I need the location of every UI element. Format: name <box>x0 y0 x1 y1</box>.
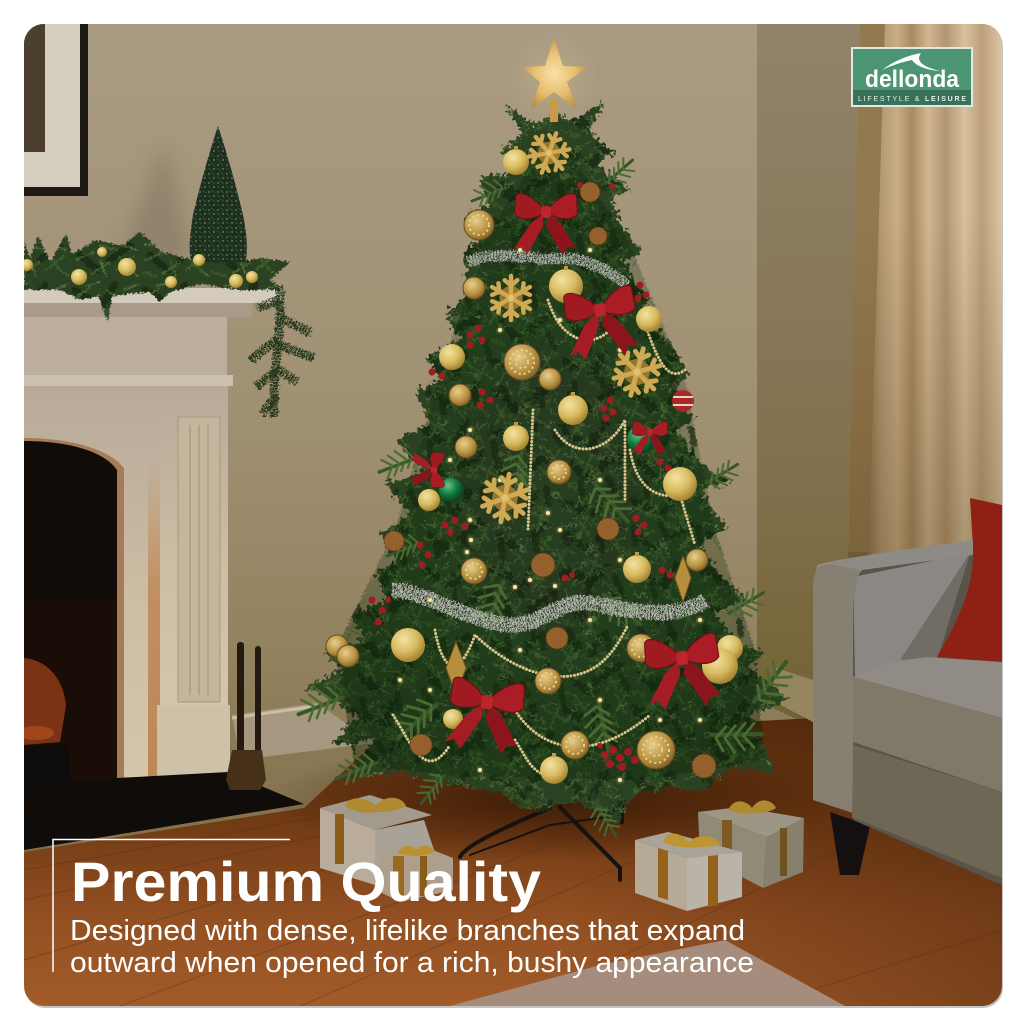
gift centre right <box>635 832 742 911</box>
rug <box>450 940 845 1006</box>
logo plate <box>851 47 973 107</box>
gift far right <box>698 800 804 888</box>
christmas tree <box>299 32 801 839</box>
silver tinsel top <box>468 256 628 286</box>
firebox glow <box>24 600 117 780</box>
star glow <box>508 32 600 124</box>
garland ornaments <box>21 247 258 288</box>
fairy lights <box>398 248 702 782</box>
logo swoosh <box>882 53 940 71</box>
foliage tone <box>335 130 765 780</box>
mat <box>24 24 80 187</box>
logo name: dellonda <box>865 66 960 93</box>
moulding <box>24 375 233 386</box>
foliage overlay <box>335 130 765 780</box>
heading: Premium Quality <box>71 850 541 913</box>
curtain drape <box>868 24 1002 560</box>
gold baubles <box>391 149 743 784</box>
hanging garland <box>251 286 314 417</box>
arm inner shadow <box>900 553 970 660</box>
band under shelf <box>24 303 252 317</box>
pearl garlands <box>393 300 695 775</box>
shelf <box>24 288 281 303</box>
side wall <box>757 24 880 760</box>
sofa seat front <box>853 677 1002 792</box>
column warm edge <box>148 478 160 776</box>
text frame <box>53 840 290 972</box>
cone <box>190 126 247 268</box>
plinth <box>157 705 230 778</box>
red striped bauble <box>672 390 694 412</box>
tree wall shadow <box>122 158 190 259</box>
gift back left <box>320 795 434 885</box>
stand brace <box>470 815 620 855</box>
pine cones <box>384 182 716 778</box>
wall picture <box>24 24 88 196</box>
sofa base <box>852 745 1002 878</box>
caption <box>70 850 754 979</box>
baseboard left <box>232 703 374 760</box>
curtain shade <box>848 24 1002 560</box>
tree stand <box>460 800 622 880</box>
sofa arm top <box>814 540 973 590</box>
firebox <box>24 441 117 820</box>
mantel garland <box>21 232 314 417</box>
hearth <box>24 772 304 850</box>
red berries <box>368 182 674 771</box>
gift front left <box>380 845 453 902</box>
glitter baubles <box>326 210 708 769</box>
sofa arm inner <box>853 553 970 676</box>
red pillow <box>937 498 1002 662</box>
garland body <box>24 232 290 322</box>
bauble caps <box>514 146 639 757</box>
glitter lace <box>466 215 669 763</box>
body line 1: Designed with dense, lifelike branches that expand <box>70 915 745 947</box>
fire tools <box>226 642 266 790</box>
grate <box>24 745 70 780</box>
foliage <box>303 103 790 822</box>
sofa leg <box>830 812 870 875</box>
tool base <box>226 750 266 790</box>
surround <box>24 386 160 778</box>
sofa arm front <box>813 564 860 813</box>
wall <box>24 24 1002 864</box>
baseboard right <box>773 667 813 722</box>
frieze <box>24 317 227 377</box>
arch trim <box>24 438 124 778</box>
floor planks <box>24 821 1002 1006</box>
logs <box>24 658 66 745</box>
green baubles <box>439 425 655 502</box>
sofa seat <box>853 657 1002 718</box>
logo tagline: LIFESTYLE & LEISURE <box>858 96 966 103</box>
gold snowflakes <box>480 127 663 525</box>
star <box>522 38 587 109</box>
floor right shading <box>661 738 1002 1006</box>
floor <box>24 718 1002 1006</box>
column <box>160 386 228 708</box>
column inset <box>178 417 220 702</box>
tree floor shadow <box>303 768 790 854</box>
sofa <box>813 498 1002 885</box>
ember <box>24 726 54 740</box>
frame <box>24 24 88 196</box>
logo band <box>853 90 971 105</box>
gift boxes <box>320 795 804 911</box>
baseboard moulding <box>232 706 317 718</box>
gold drop ornaments <box>446 556 691 694</box>
curtain side <box>848 24 885 552</box>
star stem <box>550 100 558 122</box>
star topper <box>508 32 600 124</box>
branch tips <box>299 155 801 839</box>
picture <box>24 24 45 152</box>
fireplace <box>18 288 304 850</box>
curtain <box>848 24 1002 560</box>
column flutes <box>190 425 208 695</box>
bottle brush tree <box>190 126 247 268</box>
red bows <box>410 194 724 756</box>
silver tinsel bottom <box>392 590 706 625</box>
stand legs <box>460 800 622 880</box>
sofa back fill <box>853 545 1002 885</box>
tool handle right <box>255 646 261 752</box>
logo green <box>853 49 971 105</box>
tool handle left <box>237 642 244 752</box>
body line 2: outward when opened for a rich, bushy appearance <box>70 947 754 979</box>
logo <box>851 47 973 107</box>
